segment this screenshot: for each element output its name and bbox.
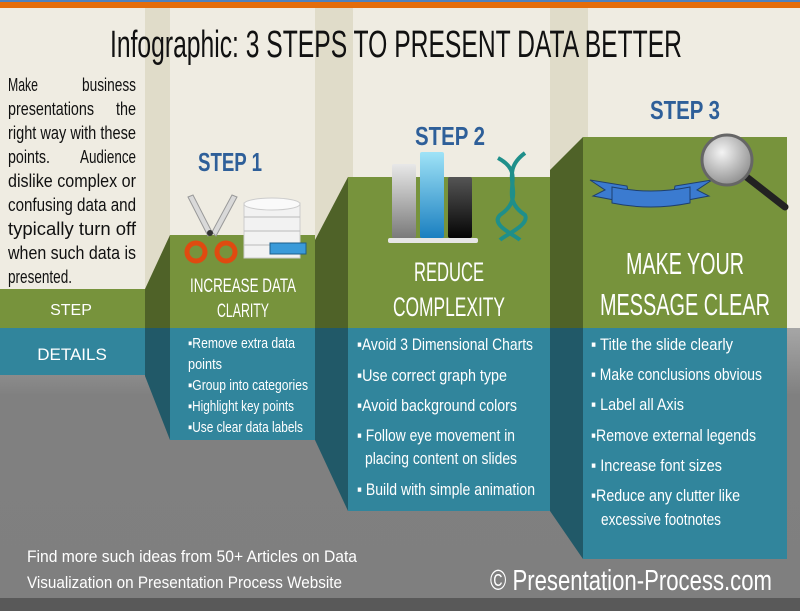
intro paragraph: when such data is <box>7 243 136 263</box>
intro paragraph: dislike complex or <box>8 171 136 191</box>
panel: step 3: ▪ Title the slide clearly <box>591 335 733 354</box>
icon: ribbon banner <box>590 180 712 207</box>
panel: step 1: INCREASE DATA <box>190 276 296 297</box>
panel: step 2: STEP 2 <box>415 121 485 151</box>
panel: step 2: ▪Use correct graph type <box>357 366 507 385</box>
panel: step 3: ▪Reduce any clutter like <box>591 486 740 505</box>
panel: step 2: ▪Avoid 3 Dimensional Charts <box>357 335 533 354</box>
panel: step 2: REDUCE <box>414 257 484 287</box>
intro paragraph <box>7 75 137 287</box>
intro paragraph: typically turn off <box>8 219 137 239</box>
left labels: step and details: DETAILS <box>37 345 107 364</box>
left labels: step and details: STEP <box>50 302 92 319</box>
panel: step 1: ▪Use clear data labels <box>188 419 303 436</box>
icon: dna <box>498 153 526 240</box>
panel: step 1 <box>145 147 315 440</box>
panel: step 3: ▪ Make conclusions obvious <box>591 365 762 384</box>
intro paragraph: confusing data and <box>8 195 136 215</box>
footer text: Visualization on Presentation Process Website <box>27 573 342 592</box>
panel: step 3: excessive footnotes <box>601 510 721 529</box>
panel: step 3 <box>550 95 787 559</box>
panel: step 1: points <box>188 356 222 373</box>
intro paragraph: right way with these <box>8 123 136 143</box>
panel: step 1: STEP 1 <box>198 147 262 177</box>
footer text: Find more such ideas from 50+ Articles on Data <box>27 547 357 566</box>
panel: step 2: ▪ Build with simple animation <box>357 480 535 499</box>
intro paragraph: Make <box>8 75 38 95</box>
icon: scissors <box>187 195 237 261</box>
intro paragraph: business <box>82 75 136 95</box>
panel: step 2 <box>315 121 550 511</box>
panel: step 3: ▪ Increase font sizes <box>591 456 722 475</box>
footer text <box>27 547 357 592</box>
panel: step 2: ▪ Follow eye movement in <box>357 426 515 445</box>
panel: step 3: STEP 3 <box>650 95 720 125</box>
panel: step 1: ▪Group into categories <box>188 377 308 394</box>
panel: step 1: ▪Remove extra data <box>188 335 296 352</box>
intro paragraph: the <box>116 99 136 119</box>
icon: database <box>244 198 306 258</box>
intro paragraph: points. <box>8 147 50 167</box>
panel: step 3: ▪Remove external legends <box>591 426 756 445</box>
intro paragraph: presentations <box>8 99 94 119</box>
icon: magnifier <box>702 135 785 207</box>
left labels: step and details <box>0 289 145 375</box>
icon: bar chart <box>388 152 478 243</box>
panel: step 2: COMPLEXITY <box>393 292 505 322</box>
panel: step 1: CLARITY <box>217 301 269 322</box>
intro paragraph: Audience <box>80 147 136 167</box>
panel: step 1: ▪Highlight key points <box>188 398 294 415</box>
panel: step 2: ▪Avoid background colors <box>357 396 517 415</box>
panel: step 3: ▪ Label all Axis <box>591 395 684 414</box>
panel: step 2: placing content on slides <box>365 449 517 468</box>
intro paragraph: presented. <box>8 267 72 287</box>
